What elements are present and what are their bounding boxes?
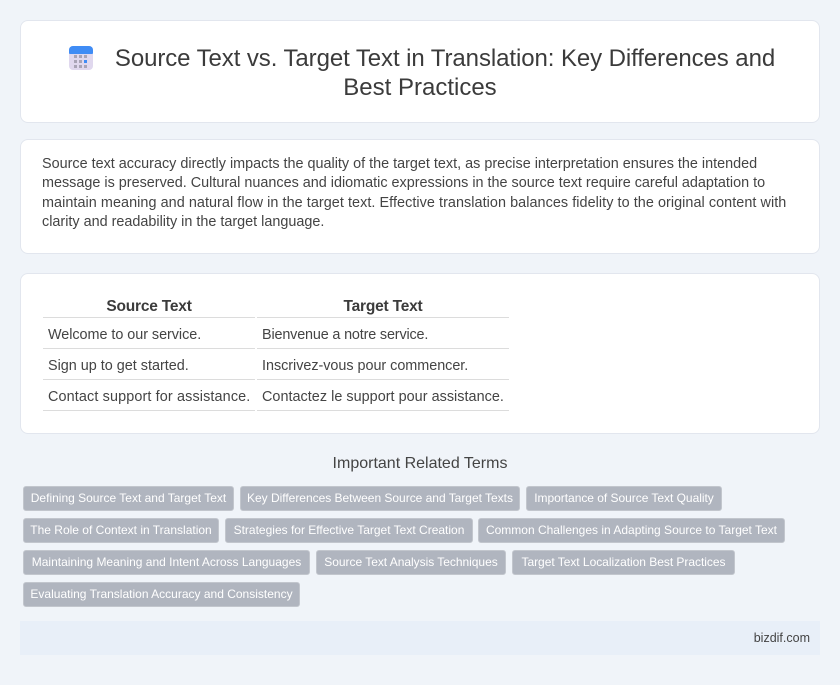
related terms heading: Important Related Terms: [333, 454, 507, 472]
tag: Source Text Analysis Techniques: [324, 555, 498, 569]
tag: [23, 518, 219, 543]
tag: Evaluating Translation Accuracy and Consistency: [30, 587, 293, 601]
intro paragraph: clarity and readability in the target language.: [42, 214, 324, 230]
title: Best Practices: [343, 74, 497, 100]
tag: Strategies for Effective Target Text Creation: [234, 523, 464, 537]
tag: Common Challenges in Adapting Source to Target Text: [486, 523, 777, 537]
tag: [316, 550, 506, 575]
header panel: [20, 20, 820, 123]
tag: [478, 518, 785, 543]
intro paragraph: maintain meaning and natural flow in the target text. Effective translation balances fidelity to the original content with: [42, 194, 786, 210]
column heading: source text: Source Text: [106, 298, 192, 315]
title: Source Text vs. Target Text in Translation: Key Differences and: [115, 44, 775, 72]
comparison table panel: [20, 273, 820, 434]
tag: [225, 518, 473, 543]
tag: [526, 486, 722, 511]
target row 3: Contactez le support pour assistance.: [262, 389, 504, 405]
intro paragraph: [42, 156, 786, 230]
tag: [23, 486, 234, 511]
related terms tags: [23, 486, 785, 607]
source row 2: Sign up to get started.: [48, 358, 189, 374]
tag: Target Text Localization Best Practices: [521, 555, 726, 569]
target row 1: Bienvenue a notre service.: [262, 327, 428, 343]
tag: [512, 550, 735, 575]
table: [43, 298, 509, 411]
tag: [23, 550, 310, 575]
tag: Key Differences Between Source and Target Texts: [247, 491, 513, 505]
intro paragraph: message is preserved. Cultural nuances and idiomatic expressions in the source text require careful adaptation to: [42, 175, 765, 191]
intro paragraph: Source text accuracy directly impacts the quality of the target text, as precise interpretation ensures the intended: [42, 156, 757, 172]
tag: Maintaining Meaning and Intent Across Languages: [32, 555, 301, 569]
tag: Importance of Source Text Quality: [534, 491, 714, 505]
tag: Defining Source Text and Target Text: [31, 491, 226, 505]
tag: [23, 582, 300, 607]
target row 2: Inscrivez-vous pour commencer.: [262, 358, 468, 374]
tag: The Role of Context in Translation: [30, 523, 212, 537]
footer bar: [20, 621, 820, 655]
title: [115, 44, 775, 100]
footer credit: bizdif.com: [754, 631, 810, 645]
tag: [240, 486, 520, 511]
icon: calendar grid: [69, 46, 93, 70]
source row 1: Welcome to our service.: [48, 327, 201, 343]
intro text panel: [20, 139, 820, 254]
source row 3: Contact support for assistance.: [48, 389, 250, 405]
column heading: target text: Target Text: [343, 298, 423, 315]
